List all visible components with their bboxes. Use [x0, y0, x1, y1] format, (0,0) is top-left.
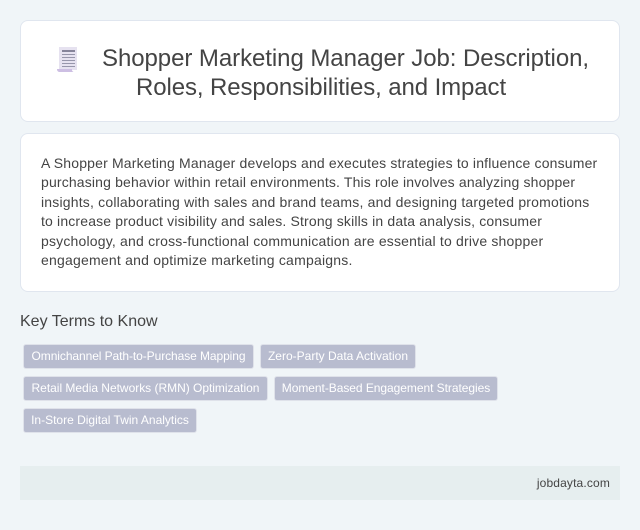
title: Shopper Marketing Manager Job: Description,: [102, 45, 589, 72]
description text: insights, collaborating with sales and brand teams, and designing targeted promotions: [41, 194, 589, 210]
description text: A Shopper Marketing Manager develops and executes strategies to influence consumer: [41, 155, 597, 171]
tag: Retail Media Networks (RMN) Optimization: [32, 381, 259, 395]
tag: Omnichannel Path-to-Purchase Mapping: [32, 349, 245, 363]
description text: psychology, and cross-functional communication are essential to drive shopper: [41, 233, 543, 249]
icon: receipt document: [57, 47, 77, 72]
header panel: [20, 20, 620, 122]
description panel: [20, 133, 620, 292]
key terms tags: [23, 344, 498, 433]
tag: [23, 408, 197, 433]
title: [102, 45, 589, 101]
tag: [274, 376, 498, 401]
description text: purchasing behavior within retail environments. This role involves analyzing shopper: [41, 174, 575, 190]
tag: In-Store Digital Twin Analytics: [31, 413, 189, 427]
tag: Zero-Party Data Activation: [268, 349, 408, 363]
source credit: jobdayta.com: [537, 476, 610, 490]
footer bar: [20, 466, 620, 500]
tag: [23, 344, 254, 369]
tag: [23, 376, 268, 401]
heading: key terms: Key Terms to Know: [20, 313, 158, 330]
description text: engagement and optimize marketing campaigns.: [41, 252, 353, 268]
tag: Moment-Based Engagement Strategies: [282, 381, 490, 395]
description text: [41, 155, 597, 268]
tag: [260, 344, 416, 369]
description text: to increase product visibility and sales. Strong skills in data analysis, consumer: [41, 213, 542, 229]
title: Roles, Responsibilities, and Impact: [136, 74, 506, 101]
